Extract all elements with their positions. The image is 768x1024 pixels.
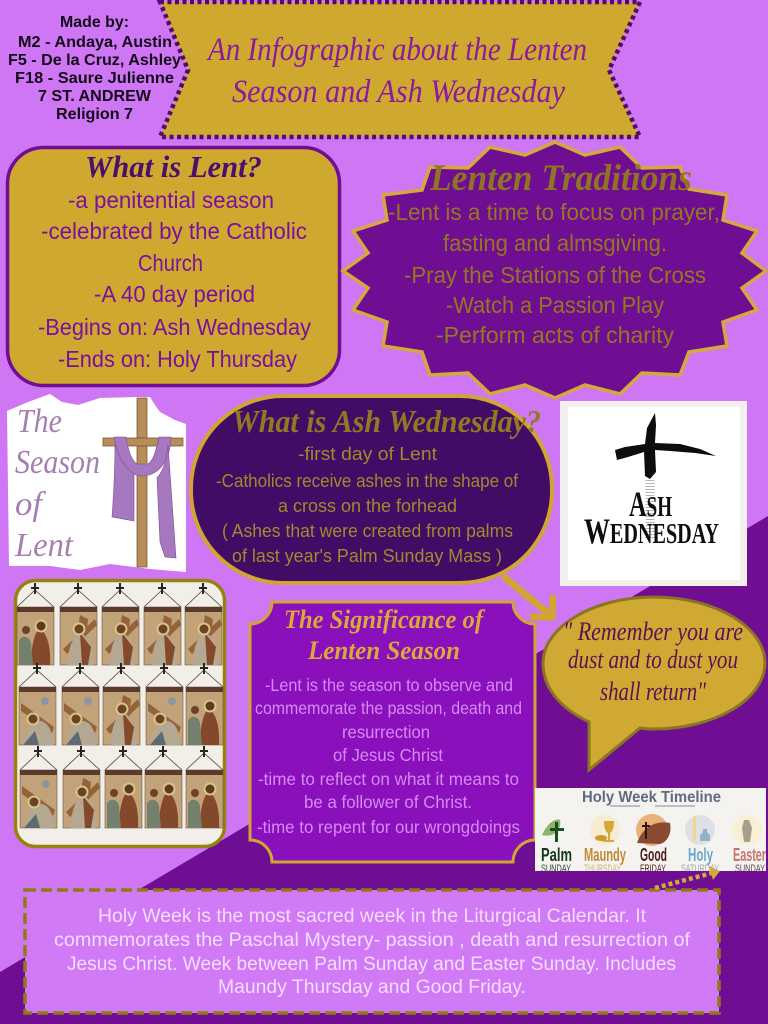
title text: An Infographic about the Lenten <box>206 32 587 68</box>
panel: significance of Lenten season <box>250 602 535 862</box>
quote text: shall return" <box>600 677 706 706</box>
icon: chalice <box>590 815 620 845</box>
traditions text: -Pray the Stations of the Cross <box>404 262 706 288</box>
timeline heading: Holy Week Timeline <box>582 789 721 806</box>
arrow: dotted to timeline <box>655 866 720 888</box>
callout: remember you are dust <box>543 597 765 770</box>
holy week paragraph: Jesus Christ. Week between Palm Sunday and Easter Sunday. Includes <box>67 954 676 975</box>
day names: Good <box>640 845 667 865</box>
text: the season of Lent <box>14 403 100 564</box>
day sublabels: THURSDAY <box>584 863 621 875</box>
image: Ash Wednesday cross <box>560 401 747 586</box>
significance text: -Lent is the season to observe and <box>265 675 513 695</box>
ash wednesday lettering: WEDNESDAY <box>584 511 719 551</box>
text: the season of Lent: Lent <box>14 527 74 564</box>
holy week paragraph: commemorates the Paschal Mystery- passion , death and resurrection of <box>54 930 691 951</box>
credits text block: Made by: <box>60 14 129 31</box>
icon: calvary <box>636 814 671 846</box>
credits text block: F5 - De la Cruz, Ashley <box>8 52 181 69</box>
holy week paragraph <box>54 906 691 998</box>
title text <box>206 32 587 110</box>
day names: Holy <box>688 845 713 865</box>
text: the season of Lent: Season <box>15 444 100 481</box>
icon: holy oil <box>685 815 715 845</box>
holy week paragraph: Holy Week is the most sacred week in the Liturgical Calendar. It <box>98 906 647 927</box>
image: holy week timeline <box>535 788 766 875</box>
arrow: ash panel to quote <box>503 576 553 617</box>
heading: Lenten traditions: Lenten Traditions <box>429 158 692 199</box>
significance text: -time to repent for our wrongdoings <box>257 817 520 837</box>
Ash Wednesday text: of last year's Palm Sunday Mass ) <box>232 545 502 566</box>
Lent facts text: Church <box>138 250 203 276</box>
credits text block: F18 - Saure Julienne <box>15 70 174 87</box>
credits text block: 7 ST. ANDREW <box>38 88 151 105</box>
title banner <box>160 2 640 137</box>
text: the season of Lent: The <box>17 403 62 440</box>
image: the season of Lent cross <box>7 394 186 572</box>
credits text block: M2 - Andaya, Austin <box>18 34 172 51</box>
icon: palm <box>542 820 564 842</box>
Lent facts text: -Begins on: Ash Wednesday <box>38 314 311 340</box>
heading: significance: The Significance of <box>284 605 485 634</box>
Ash Wednesday text <box>216 443 519 566</box>
Ash Wednesday text: ( Ashes that were created from palms <box>222 520 513 541</box>
heading: what is Ash Wednesday: What is Ash Wednesday? <box>232 403 541 439</box>
Ash Wednesday text: a cross on the forhead <box>278 495 457 516</box>
Lent facts text <box>38 187 311 372</box>
traditions text: fasting and almsgiving. <box>443 230 667 256</box>
significance text: resurrection <box>342 722 430 742</box>
significance text <box>255 675 522 837</box>
day sublabels: SUNDAY <box>541 863 571 875</box>
day sublabels: FRIDAY <box>640 863 666 875</box>
icon: risen Christ <box>732 815 762 845</box>
traditions text: -Watch a Passion Play <box>446 292 664 318</box>
panel: Lenten traditions starburst <box>343 142 766 398</box>
Ash Wednesday text: -first day of Lent <box>298 443 437 464</box>
quote text <box>563 617 743 706</box>
day names: Maundy <box>584 845 626 865</box>
ash wednesday lettering <box>584 484 719 551</box>
Lent facts text: -A 40 day period <box>94 281 255 307</box>
significance text: be a follower of Christ. <box>304 792 472 812</box>
image: stations of the cross <box>16 580 224 846</box>
Lent facts text: -celebrated by the Catholic <box>41 218 307 244</box>
significance text: commemorate the passion, death and <box>255 698 522 718</box>
title text: Season and Ash Wednesday <box>232 74 565 110</box>
traditions text <box>388 199 720 348</box>
icon: wooden cross with cloth <box>103 398 183 567</box>
panel: what is Ash Wednesday <box>191 396 552 583</box>
heading: what is Lent: What is Lent? <box>85 149 262 184</box>
Lent facts text: -a penitential season <box>68 187 274 213</box>
Ash Wednesday text: -Catholics receive ashes in the shape of <box>216 470 519 491</box>
panel: holy week text box <box>25 890 719 1013</box>
day sublabels <box>541 863 765 875</box>
icon: ash cross <box>615 413 716 479</box>
heading: significance <box>284 605 485 665</box>
day names: Palm <box>541 845 572 865</box>
credits text block <box>8 14 181 123</box>
traditions text: -Perform acts of charity <box>436 322 674 348</box>
significance text: -time to reflect on what it means to <box>258 769 519 789</box>
holy week paragraph: Maundy Thursday and Good Friday. <box>218 977 526 998</box>
Lent facts text: -Ends on: Holy Thursday <box>58 346 297 372</box>
credits text block: Religion 7 <box>56 106 133 123</box>
day sublabels: SATURDAY <box>681 863 719 875</box>
ash wednesday lettering: ASH <box>629 484 672 524</box>
heading: significance: Lenten Season <box>307 636 460 665</box>
traditions text: -Lent is a time to focus on prayer, <box>388 199 720 225</box>
significance text: of Jesus Christ <box>333 745 443 765</box>
panel: what is Lent <box>8 148 340 386</box>
day names <box>541 845 766 865</box>
text: the season of Lent: of <box>15 486 47 523</box>
